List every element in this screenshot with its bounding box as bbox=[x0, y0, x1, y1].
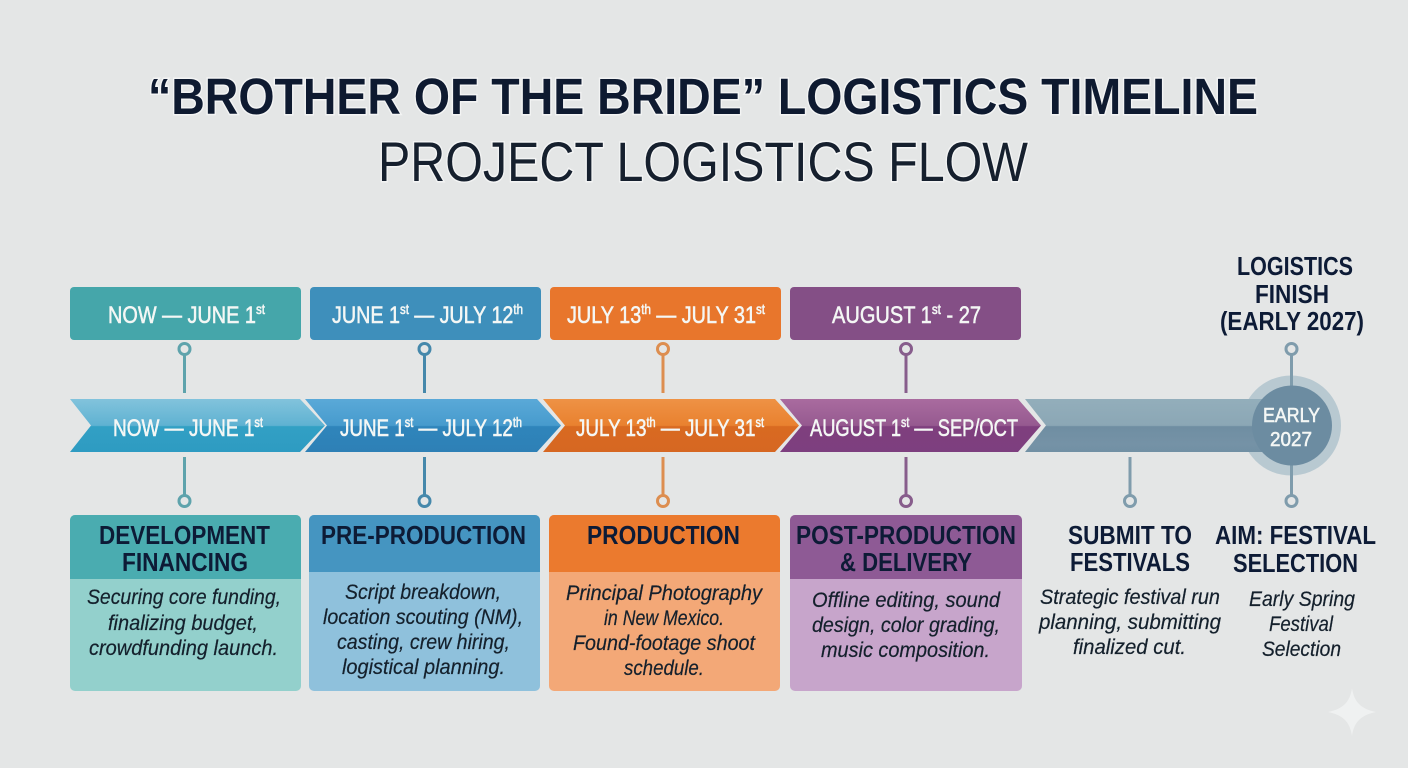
date box: June 1st to July 12th: — JULY 12 bbox=[409, 302, 513, 329]
text block: aim festival selection: AIM: FESTIVAL bbox=[1215, 520, 1376, 550]
timeline chevron: June 1st to July 12th: — JULY 12 bbox=[413, 415, 513, 442]
date box: August 1st to 27 bbox=[790, 287, 1021, 340]
date box: July 13th to July 31st: th bbox=[641, 301, 651, 317]
connector: teal lower bbox=[179, 457, 190, 506]
panel: production bbox=[549, 515, 780, 691]
date box: June 1st to July 12th: JUNE 1 bbox=[332, 302, 415, 329]
text block: submit to festivals bbox=[1038, 520, 1221, 659]
panel: pre-production: casting, crew hiring, bbox=[337, 631, 510, 654]
date box: July 13th to July 31st bbox=[550, 287, 781, 340]
panel: development financing: crowdfunding launch. bbox=[89, 637, 278, 660]
date box: August 1st to 27: - 27 bbox=[941, 302, 981, 329]
panel: production: in New Mexico. bbox=[604, 607, 724, 630]
connector: orange upper bbox=[658, 344, 668, 393]
date box: now to June 1st: st bbox=[256, 301, 265, 317]
text block: aim festival selection: Early Spring bbox=[1249, 588, 1355, 611]
connector: finish upper node bbox=[1286, 344, 1297, 354]
panel: pre-production: location scouting (NM), bbox=[323, 606, 523, 629]
timeline chevron: July 13th to July 31st: — JULY 31 bbox=[656, 415, 755, 442]
timeline chevron: July 13th to July 31st: st bbox=[755, 414, 764, 430]
panel: pre-production bbox=[309, 515, 540, 691]
panel: post-production and delivery: Offline editing, sound bbox=[812, 589, 1001, 612]
text block: submit to festivals: finalized cut. bbox=[1073, 636, 1186, 659]
panel: post-production and delivery: & DELIVERY bbox=[840, 547, 972, 577]
title bbox=[148, 68, 1258, 193]
panel: post-production and delivery: POST-PRODUCTION bbox=[796, 520, 1016, 550]
text block: logistics finish: (EARLY 2027) bbox=[1220, 306, 1364, 336]
date box: July 13th to July 31st: JULY 13 bbox=[567, 302, 657, 329]
title: “BROTHER OF THE BRIDE” LOGISTICS TIMELINE bbox=[148, 68, 1258, 125]
timeline chevron: now to June 1st: NOW — JUNE 1 bbox=[113, 415, 292, 442]
connector: blue upper bbox=[419, 344, 430, 393]
text block: aim festival selection: SELECTION bbox=[1233, 548, 1358, 578]
milestone: bar, ring and early 2027 circle: 2027 bbox=[1270, 429, 1312, 451]
panel: pre-production: Script breakdown, bbox=[345, 581, 501, 604]
connector: orange lower bbox=[658, 457, 668, 506]
timeline chevron: June 1st to July 12th bbox=[305, 399, 561, 452]
date box: now to June 1st: NOW — JUNE 1 bbox=[108, 302, 287, 329]
date box: June 1st to July 12th bbox=[310, 287, 541, 340]
panel: development financing: FINANCING bbox=[122, 547, 248, 577]
panel: development financing: finalizing budget, bbox=[108, 612, 258, 635]
milestone: bar, ring and early 2027 circle: EARLY bbox=[1263, 405, 1320, 427]
panel: post-production and delivery: music composition. bbox=[821, 639, 990, 662]
text block: submit to festivals: planning, submitting bbox=[1038, 611, 1221, 634]
timeline chevron: July 13th to July 31st: th bbox=[646, 414, 656, 430]
text block: logistics finish: LOGISTICS bbox=[1237, 251, 1353, 281]
connector: purple upper bbox=[900, 344, 912, 393]
text block: aim festival selection: Selection bbox=[1262, 638, 1341, 661]
date box: July 13th to July 31st: st bbox=[756, 301, 765, 317]
connector: purple lower bbox=[900, 457, 912, 506]
text block: submit to festivals: Strategic festival run bbox=[1040, 586, 1220, 609]
text block: aim festival selection bbox=[1215, 520, 1376, 661]
timeline chevron: July 13th to July 31st bbox=[543, 399, 799, 452]
date box: July 13th to July 31st: — JULY 31 bbox=[651, 302, 756, 329]
title: PROJECT LOGISTICS FLOW bbox=[378, 130, 1028, 193]
timeline chevron: June 1st to July 12th: th bbox=[513, 414, 522, 430]
connector: submit lower bbox=[1124, 457, 1136, 506]
text block: logistics finish: FINISH bbox=[1255, 279, 1329, 309]
panel: production: PRODUCTION bbox=[587, 520, 740, 550]
panel: post-production and delivery bbox=[790, 515, 1022, 691]
timeline chevron: August 1st to Sep/Oct: AUGUST 1 bbox=[810, 415, 930, 442]
panel: pre-production: logistical planning. bbox=[342, 656, 505, 679]
milestone: bar, ring and early 2027 circle bbox=[1025, 355, 1341, 495]
text block: logistics finish bbox=[1220, 251, 1364, 336]
panel: development financing bbox=[70, 515, 301, 691]
timeline chevron: July 13th to July 31st: JULY 13 bbox=[576, 415, 666, 442]
timeline chevron: August 1st to Sep/Oct bbox=[780, 399, 1041, 452]
timeline chevron: now to June 1st: st bbox=[254, 414, 263, 430]
connector: aim lower node bbox=[1286, 496, 1297, 506]
panel: development financing: DEVELOPMENT bbox=[99, 520, 270, 550]
panel: production: schedule. bbox=[624, 657, 704, 680]
text block: submit to festivals: SUBMIT TO bbox=[1068, 520, 1192, 550]
panel: production: Principal Photography bbox=[566, 582, 763, 605]
connector: teal upper bbox=[179, 344, 190, 393]
icon: sparkle bbox=[1328, 688, 1376, 736]
text block: submit to festivals: FESTIVALS bbox=[1070, 547, 1190, 577]
text block: aim festival selection: Festival bbox=[1269, 613, 1334, 636]
panel: development financing: Securing core funding, bbox=[87, 586, 281, 609]
panel: pre-production: PRE-PRODUCTION bbox=[321, 520, 526, 550]
timeline chevron: now to June 1st bbox=[70, 399, 325, 452]
date box: June 1st to July 12th: th bbox=[513, 301, 523, 317]
timeline chevron: August 1st to Sep/Oct: — SEP/OCT bbox=[909, 415, 1018, 442]
date box: August 1st to 27: AUGUST 1 bbox=[832, 302, 952, 329]
date box: June 1st to July 12th: st bbox=[400, 301, 409, 317]
timeline chevron: June 1st to July 12th: st bbox=[405, 414, 413, 430]
panel: post-production and delivery: design, color grading, bbox=[812, 614, 1000, 637]
date box: now to June 1st bbox=[70, 287, 301, 340]
timeline chevron: August 1st to Sep/Oct: st bbox=[901, 414, 909, 430]
connector: blue lower bbox=[419, 457, 430, 506]
timeline chevron: June 1st to July 12th: JUNE 1 bbox=[340, 415, 423, 442]
panel: production: Found-footage shoot bbox=[573, 632, 756, 655]
date box: August 1st to 27: st bbox=[932, 301, 941, 317]
